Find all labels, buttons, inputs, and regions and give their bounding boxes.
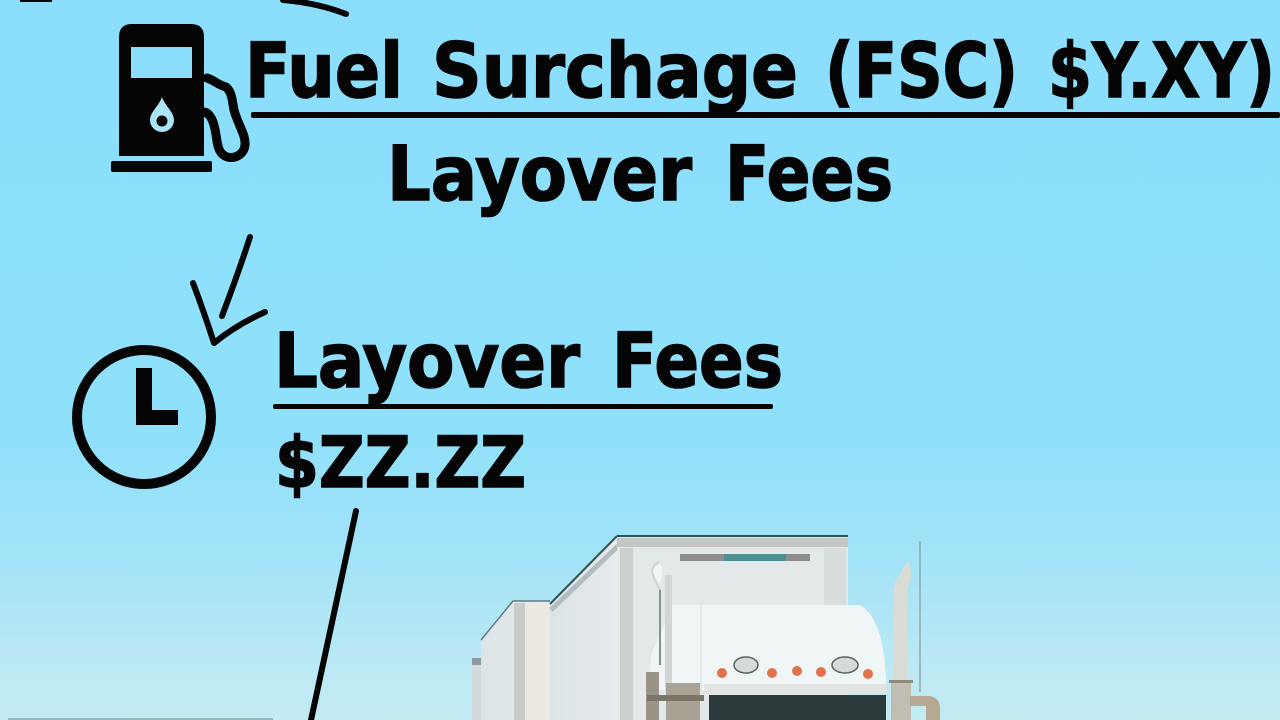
arrow: check-style pointer to clock [193,237,265,343]
heading: fuel surcharge: (FSC) [825,26,1018,115]
cab lower chrome left [646,672,659,720]
heading: fuel surcharge: Fuel [245,26,403,115]
subheading: layover fees: Layover [387,129,692,218]
top-left fragment mark [20,0,52,2]
heading: layover fees: Fees [612,316,783,405]
middle trailer [481,601,550,720]
icon: clock [77,350,211,484]
truck [472,535,940,720]
heading: layover fees [274,316,783,405]
cab visor [704,684,887,694]
trailer logo band [680,554,810,561]
main trailer side [550,536,617,720]
rear trailer sliver [472,659,481,720]
cab fairing [648,605,887,690]
arrow: long line to truck [311,511,356,720]
windshield [709,695,886,720]
amber marker lights [717,666,873,679]
left exhaust [652,562,660,665]
value: layover amount: $ZZ.ZZ [275,422,526,504]
icon: fuel pump [111,24,245,172]
right exhaust [894,560,912,680]
subheading: layover fees: Fees [725,129,893,218]
arrow fragment top [283,0,346,14]
horizon strip [8,718,273,720]
rule under layover fees [273,404,773,409]
right mirror arm [910,696,940,720]
antenna [919,541,921,692]
subheading: layover fees [387,129,893,218]
heading: fuel surcharge [245,26,1275,115]
heading: fuel surcharge: Surchage [432,26,798,115]
main trailer front [617,536,848,720]
headlight clusters [734,657,758,673]
rule under fuel surcharge [251,112,1280,118]
heading: layover fees: Layover [274,316,580,405]
